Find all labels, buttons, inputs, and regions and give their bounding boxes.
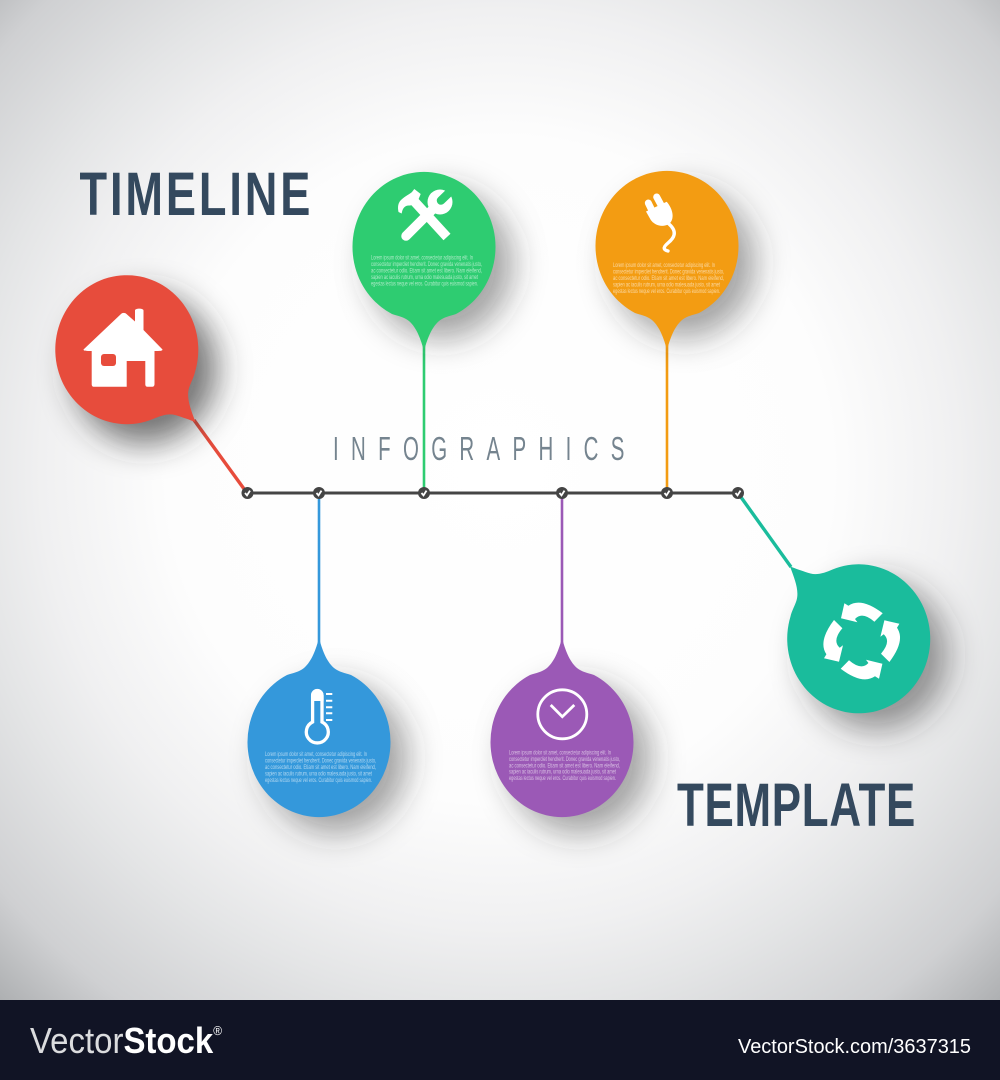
connector: green — [423, 340, 425, 493]
text block — [371, 254, 482, 288]
panel: plug (orange) — [596, 171, 756, 350]
connector: red — [194, 420, 247, 493]
text block: egestas lectus neque vel eros. Curabitur quis euismod sapien. — [613, 288, 720, 295]
icon: hammer and wrench — [398, 186, 456, 237]
text block: egestas lectus neque vel eros. Curabitur quis euismod sapien. — [371, 280, 478, 288]
footer image id: VectorStock.com/3637315 — [738, 1036, 971, 1058]
icon: thermometer — [306, 689, 332, 743]
subtitle: INFOGRAPHICS: INFOGRAPHICS — [333, 430, 624, 467]
node 3 — [418, 487, 430, 499]
connector: teal — [738, 493, 791, 567]
node 6 — [732, 487, 744, 499]
icon: recycle arrows — [823, 603, 900, 679]
text block: consectetur imperdiet hendrerit. Donec gravida venenatis justo, — [509, 756, 620, 763]
text block: consectetur imperdiet hendrerit. Donec gravida venenatis justo, — [265, 758, 376, 764]
node 5 — [661, 487, 673, 499]
text block — [509, 750, 620, 782]
footer logo: VectorStock — [30, 1020, 221, 1061]
text block: egestas lectus neque vel eros. Curabitur quis euismod sapien. — [265, 777, 372, 784]
text block: sapien ac iaculis rutrum, urna odio malesuada justo, sit amet — [509, 769, 616, 776]
text block: ac consectetur odio. Etiam sit amet est libero. Nam eleifend, — [613, 275, 724, 282]
text block: sapien ac iaculis rutrum, urna odio malesuada justo, sit amet — [265, 770, 372, 777]
node 2 — [313, 487, 325, 499]
panel: thermometer (blue) — [247, 638, 408, 833]
text block: consectetur imperdiet hendrerit. Donec gravida venenatis justo, — [613, 268, 724, 276]
text block: Lorem ipsum dolor sit amet, consectetur adipiscing elit. In — [265, 751, 367, 758]
text block: ac consectetur odio. Etiam sit amet est libero. Nam eleifend, — [509, 762, 620, 769]
text block — [613, 262, 724, 295]
text block: consectetur imperdiet hendrerit. Donec gravida venenatis justo, — [371, 261, 482, 268]
text block: Lorem ipsum dolor sit amet, consectetur adipiscing elit. In — [371, 254, 473, 262]
text block: egestas lectus neque vel eros. Curabitur quis euismod sapien. — [509, 775, 616, 782]
panel: clock (purple) — [490, 638, 651, 833]
node 4 — [556, 487, 568, 499]
node 1 — [242, 487, 254, 499]
icon: plug — [646, 197, 674, 251]
text block: ac consectetur odio. Etiam sit amet est libero. Nam eleifend, — [371, 268, 482, 274]
title: TIMELINE: TIMELINE — [80, 160, 310, 229]
text block — [265, 751, 376, 784]
title: TEMPLATE: TEMPLATE — [677, 772, 915, 840]
panel: home (red) — [55, 275, 217, 444]
text block: Lorem ipsum dolor sit amet, consectetur adipiscing elit. In — [509, 750, 611, 757]
text block: sapien ac iaculis rutrum, urna odio malesuada justo, sit amet — [613, 282, 720, 288]
panel: tools (green) — [352, 172, 513, 351]
connector: blue — [318, 493, 320, 645]
icon: house — [84, 309, 162, 387]
footer bar — [0, 1000, 1000, 1080]
icon: clock — [538, 690, 587, 739]
connector: purple — [561, 493, 563, 645]
footer logo: ® — [213, 1023, 222, 1038]
timeline axis — [242, 487, 744, 499]
connector: orange — [666, 340, 668, 493]
text block: ac consectetur odio. Etiam sit amet est libero. Nam eleifend, — [265, 764, 376, 771]
panel: recycle (teal) — [787, 564, 948, 730]
text block: Lorem ipsum dolor sit amet, consectetur adipiscing elit. In — [613, 262, 715, 269]
text block: sapien ac iaculis rutrum, urna odio malesuada justo, sit amet — [371, 274, 478, 281]
